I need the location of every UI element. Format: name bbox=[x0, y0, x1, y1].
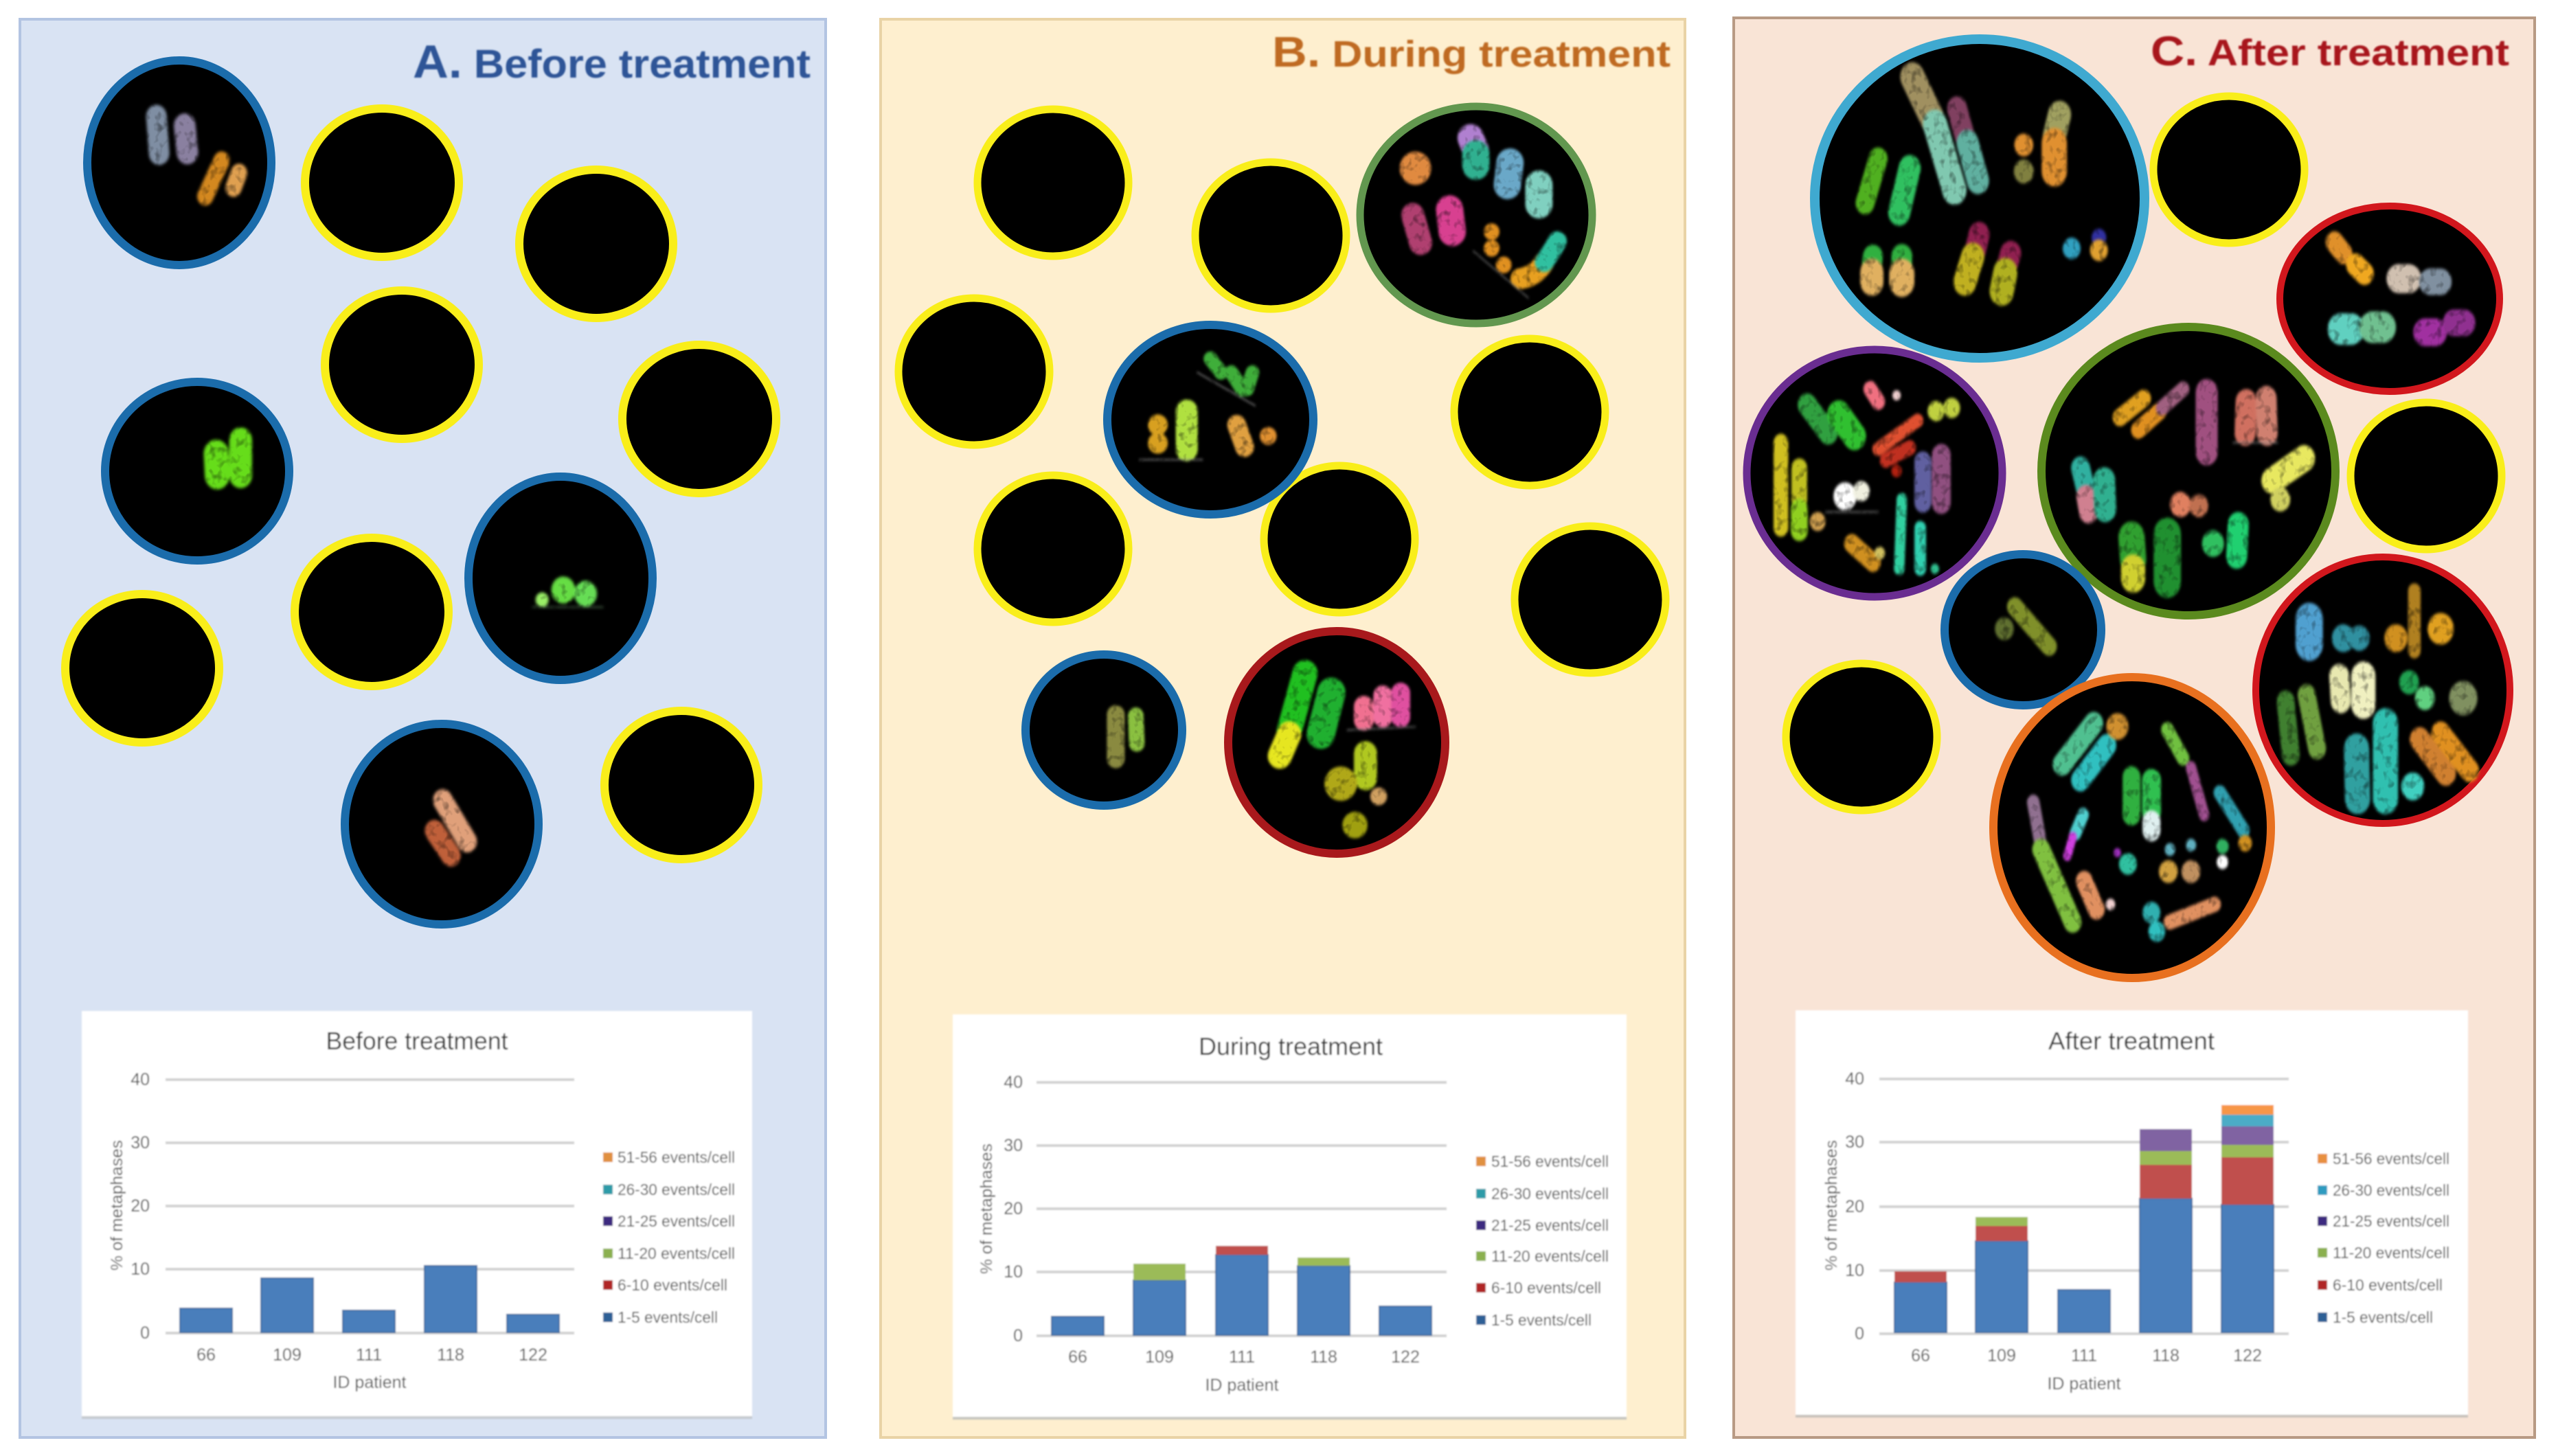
cell A8: blue ring bbox=[468, 477, 653, 680]
x axis labels C: 109 bbox=[1987, 1346, 2016, 1365]
cell B8: blue ring bbox=[1107, 325, 1313, 514]
legend C bbox=[2318, 1150, 2449, 1326]
legend B bbox=[1476, 1152, 1609, 1329]
legend C: 1-5 events/cell bbox=[2333, 1308, 2433, 1326]
cell B11: dark red ring bbox=[1228, 631, 1445, 854]
legend C: 26-30 events/cell bbox=[2333, 1181, 2449, 1199]
cell B6: yellow ring bbox=[977, 475, 1129, 622]
y axis labels A: 20 bbox=[131, 1196, 150, 1216]
y axis labels C: 30 bbox=[1845, 1133, 1864, 1152]
cell C7: blue ring bbox=[1945, 554, 2101, 705]
y axis labels A: 30 bbox=[131, 1133, 150, 1152]
y axis title C: % of metaphases bbox=[1822, 1140, 1841, 1271]
y axis labels C: 20 bbox=[1845, 1197, 1864, 1216]
y axis labels B: 0 bbox=[1013, 1326, 1023, 1345]
y axis labels A: 40 bbox=[131, 1070, 150, 1089]
y axis labels B: 20 bbox=[1004, 1199, 1023, 1218]
cell C6: yellow ring bbox=[2351, 402, 2502, 549]
x axis labels C: 122 bbox=[2233, 1346, 2262, 1365]
cell C5: green ring bbox=[2041, 327, 2335, 615]
y axis labels C: 0 bbox=[1855, 1324, 1864, 1343]
legend A: 1-5 events/cell bbox=[618, 1308, 718, 1326]
cell C2: yellow ring bbox=[2153, 96, 2305, 243]
heading C: C. After treatment bbox=[2151, 28, 2509, 74]
chart card C bbox=[1796, 1010, 2468, 1418]
stacked bars C bbox=[1894, 1105, 2274, 1332]
legend A: 51-56 events/cell bbox=[618, 1148, 735, 1166]
chart title B: During treatment bbox=[1199, 1032, 1383, 1060]
x axis labels B bbox=[1068, 1347, 1420, 1367]
x axis labels B: 118 bbox=[1310, 1347, 1337, 1367]
cell C8: red ring bbox=[2256, 557, 2510, 823]
y axis labels C bbox=[1845, 1069, 1864, 1343]
cell C10: orange ring bbox=[1993, 677, 2271, 978]
cell A4: yellow ring bbox=[325, 291, 479, 439]
gridlines B bbox=[1037, 1082, 1447, 1336]
x axis labels A bbox=[196, 1345, 547, 1365]
cell A1: blue ring bbox=[87, 60, 271, 265]
legend A: 11-20 events/cell bbox=[618, 1244, 735, 1262]
stacked bars B bbox=[1052, 1246, 1431, 1335]
y axis labels B: 40 bbox=[1004, 1073, 1023, 1092]
panel B: during treatment bbox=[881, 19, 1685, 1437]
x axis title C: ID patient bbox=[2047, 1374, 2121, 1394]
panel C: after treatment bbox=[1734, 18, 2535, 1437]
cell B5: yellow ring bbox=[1454, 339, 1605, 486]
cell B9: yellow ring bbox=[1515, 526, 1666, 673]
y axis labels B: 30 bbox=[1004, 1136, 1023, 1155]
cell A6: blue ring bbox=[105, 382, 289, 560]
y axis labels B bbox=[1004, 1073, 1023, 1345]
y axis labels A: 10 bbox=[131, 1260, 150, 1279]
cell A5: yellow ring bbox=[622, 345, 776, 493]
x axis labels C: 118 bbox=[2152, 1346, 2180, 1365]
cell A10: yellow ring bbox=[604, 711, 758, 859]
y axis labels C: 40 bbox=[1845, 1069, 1864, 1089]
y axis labels B: 10 bbox=[1004, 1262, 1023, 1282]
x axis labels B: 109 bbox=[1145, 1347, 1174, 1367]
chart title A: Before treatment bbox=[326, 1027, 508, 1055]
legend C: 51-56 events/cell bbox=[2333, 1150, 2449, 1168]
bars A bbox=[180, 1266, 559, 1332]
cell C9: yellow ring bbox=[1786, 663, 1937, 810]
cell A11: blue ring bbox=[345, 724, 539, 924]
legend B: 11-20 events/cell bbox=[1491, 1247, 1609, 1265]
cell B1: yellow ring bbox=[977, 109, 1129, 256]
cell A3: yellow ring bbox=[519, 170, 673, 318]
heading B: B. During treatment bbox=[1272, 29, 1671, 76]
gridlines A bbox=[166, 1080, 574, 1333]
x axis labels B: 66 bbox=[1068, 1347, 1087, 1367]
y axis labels C: 10 bbox=[1845, 1261, 1864, 1280]
x axis labels A: 111 bbox=[356, 1345, 382, 1365]
chart card B bbox=[953, 1014, 1627, 1420]
y axis title A: % of metaphases bbox=[108, 1140, 126, 1271]
legend A: 6-10 events/cell bbox=[618, 1276, 727, 1294]
y axis labels A bbox=[131, 1070, 150, 1343]
legend A: 26-30 events/cell bbox=[618, 1181, 735, 1198]
x axis labels B: 111 bbox=[1229, 1347, 1255, 1367]
chart title C: After treatment bbox=[2048, 1027, 2215, 1055]
cell A7: yellow ring bbox=[295, 538, 449, 686]
cell B10: blue ring bbox=[1026, 655, 1182, 806]
x axis labels A: 118 bbox=[437, 1345, 464, 1365]
cell B2: yellow ring bbox=[1195, 162, 1346, 309]
legend C: 21-25 events/cell bbox=[2333, 1212, 2449, 1230]
legend B: 6-10 events/cell bbox=[1491, 1279, 1601, 1297]
cell B3: green ring bbox=[1360, 106, 1592, 323]
x axis labels A: 122 bbox=[519, 1345, 547, 1365]
cell B4: yellow ring bbox=[898, 298, 1050, 445]
cell A9: yellow ring bbox=[65, 594, 219, 742]
x axis labels A: 109 bbox=[273, 1345, 302, 1365]
cell C3: red ring bbox=[2280, 206, 2500, 391]
legend B: 21-25 events/cell bbox=[1491, 1216, 1609, 1234]
cell C4: purple ring bbox=[1747, 350, 2002, 597]
legend A: 21-25 events/cell bbox=[618, 1212, 735, 1230]
x axis labels C bbox=[1911, 1346, 2262, 1365]
gridlines C bbox=[1879, 1079, 2289, 1334]
x axis labels C: 111 bbox=[2071, 1346, 2097, 1365]
legend B: 26-30 events/cell bbox=[1491, 1185, 1609, 1203]
y axis labels A: 0 bbox=[140, 1323, 150, 1343]
legend B: 1-5 events/cell bbox=[1491, 1311, 1592, 1329]
x axis title B: ID patient bbox=[1205, 1376, 1279, 1395]
legend B: 51-56 events/cell bbox=[1491, 1152, 1609, 1170]
legend C: 11-20 events/cell bbox=[2333, 1244, 2449, 1262]
x axis labels B: 122 bbox=[1391, 1347, 1420, 1367]
y axis title B: % of metaphases bbox=[977, 1144, 996, 1274]
legend C: 6-10 events/cell bbox=[2333, 1276, 2443, 1294]
x axis labels C: 66 bbox=[1911, 1346, 1930, 1365]
legend A bbox=[603, 1148, 735, 1326]
cell B7: yellow ring bbox=[1264, 466, 1415, 613]
cell A2: yellow ring bbox=[305, 109, 459, 257]
panel A: before treatment bbox=[20, 19, 826, 1437]
x axis title A: ID patient bbox=[332, 1373, 407, 1392]
chart card A bbox=[82, 1011, 752, 1419]
x axis labels A: 66 bbox=[196, 1345, 216, 1365]
cell C1: cyan ring bbox=[1815, 39, 2144, 358]
heading A: A. Before treatment bbox=[413, 36, 811, 88]
